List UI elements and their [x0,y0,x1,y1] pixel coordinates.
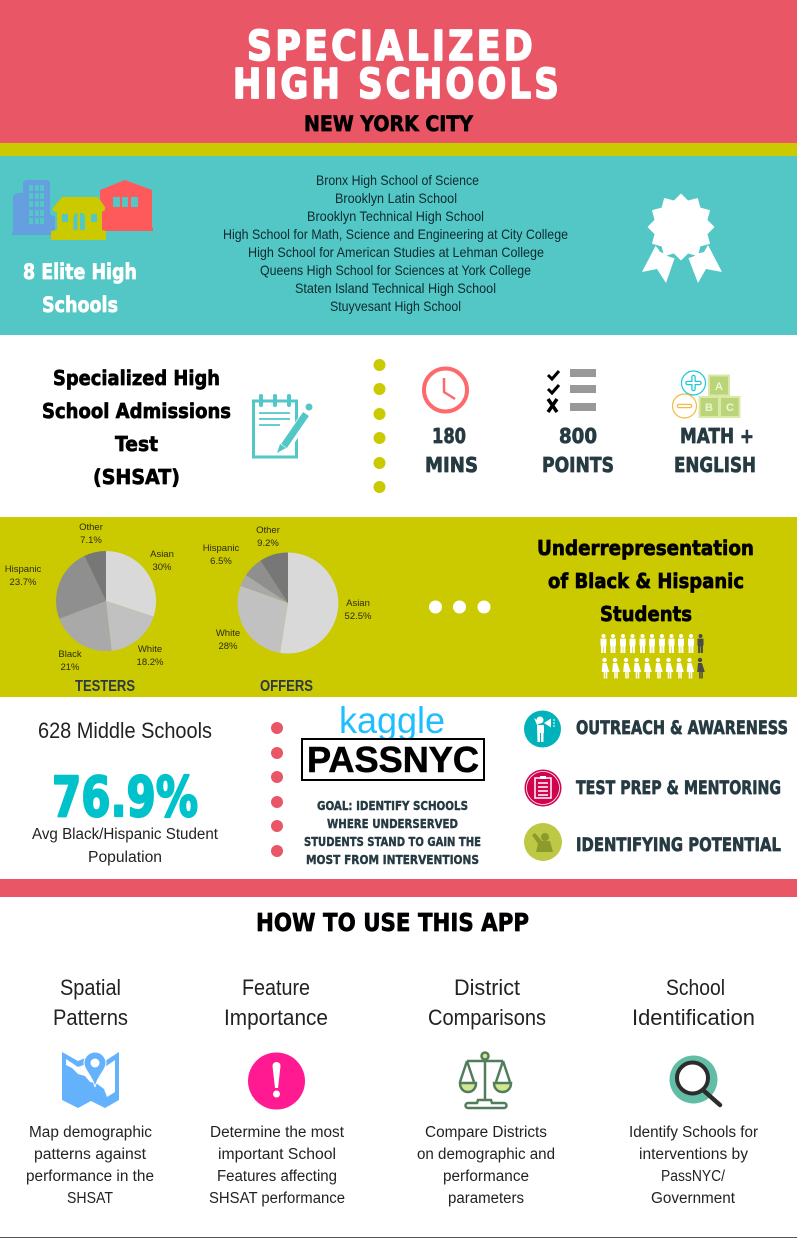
icon: clock [424,368,467,412]
pie chart: offers [203,525,372,653]
heading: district comparisons: District [454,975,520,1000]
text: district description: Compare Districts [425,1124,547,1141]
stat: 800 points: POINTS [542,453,614,477]
text: school description: Identify Schools for [629,1124,758,1141]
heading: school identification [632,975,755,1030]
stat: 180 mins: 180 [432,424,466,448]
heading: spatial patterns: Spatial [60,975,121,1000]
title: HIGH SCHOOLS [233,60,562,108]
heading: feature importance: Importance [224,1005,328,1030]
text: feature description: SHSAT performance [209,1190,345,1207]
icon: outreach megaphone [524,710,561,748]
heading: district comparisons: Comparisons [428,1005,546,1030]
pie chart: testers [5,522,174,673]
text: district description [417,1124,555,1207]
heading: underrepresentation: of Black & Hispanic [548,569,744,593]
pie chart: testers: Other [79,522,103,533]
panel: feature importance [209,975,345,1207]
logo: kaggle: kaggle [339,700,445,741]
text: goal: GOAL: IDENTIFY SCHOOLS [317,799,468,813]
heading: 8 elite high schools: 8 Elite High [23,260,137,284]
heading: school identification: School [666,975,725,1000]
icon: balance scale [460,1052,511,1108]
icon: math and letter blocks: C [726,402,734,414]
heading: feature importance [224,975,328,1030]
pie chart: offers: Other [256,525,280,536]
stat: 76.9 percent: 76.9% [52,765,198,829]
heading: 8 elite high schools: Schools [42,293,118,317]
heading: SHSAT [42,366,231,489]
text: school description: interventions by [639,1146,748,1163]
text: spatial description: patterns against [34,1146,147,1163]
text: district description: parameters [448,1190,524,1207]
stat: math and english: MATH + [680,424,754,448]
heading: spatial patterns: Patterns [53,1005,128,1030]
icon: exclamation [248,1052,305,1110]
ellipsis dots [429,600,490,614]
pie chart: testers: 7.1% [80,535,102,546]
text: spatial description: Map demographic [29,1124,152,1141]
text: feature description: Determine the most [210,1124,345,1141]
panel: PassNYC goal [302,700,484,867]
icon: male people row [600,634,704,653]
pie chart: testers: 30% [152,562,172,573]
pie chart: testers: Asian [150,549,174,560]
school list: Brooklyn Latin School [335,190,457,206]
logo: PASSNYC: PASSNYC [307,739,479,780]
timeline dots [374,359,386,493]
school list: Staten Island Technical High School [295,280,496,296]
pie chart: testers: 21% [60,662,80,673]
panel: middle schools stat [32,718,219,866]
text: goal: MOST FROM INTERVENTIONS [306,853,479,867]
panel: interventions [524,710,788,861]
school list [223,172,568,314]
text: goal: STUDENTS STAND TO GAIN THE [304,835,481,849]
stat: math and english: ENGLISH [674,453,756,477]
icon: map with pin [62,1052,119,1108]
text: 628 middle schools: 628 Middle Schools [38,718,212,743]
icon: math and letter blocks: A [715,381,723,393]
pie chart: offers: 28% [218,641,238,652]
icon: female people row [602,658,705,678]
stat: 800 points [542,424,614,477]
text: spatial description: performance in the [26,1168,154,1185]
heading: underrepresentation: Students [600,602,692,626]
heading: 8 elite high schools [23,260,137,317]
heading: underrepresentation: Underrepresentation [537,536,754,560]
heading: spatial patterns [53,975,128,1030]
pie chart: offers: Asian [346,598,370,609]
text: goal: WHERE UNDERSERVED [327,817,458,831]
text: feature description: important School [218,1146,336,1163]
heading: how to use this app: HOW TO USE THIS APP [256,908,529,937]
panel: SHSAT [0,335,797,517]
icon: award ribbon [642,194,722,283]
pie chart: testers: 18.2% [137,657,164,668]
school list: High School for American Studies at Lehman College [248,244,544,260]
panel: spatial patterns [26,975,154,1207]
heading: school identification: Identification [632,1005,755,1030]
stat: 180 mins [425,424,478,477]
icon: notepad [254,396,312,457]
icon: math and letter blocks [672,371,740,418]
school list: Brooklyn Technical High School [307,208,484,224]
pie chart: testers: 23.7% [10,577,37,588]
title [233,22,562,108]
icon: school buildings [12,180,153,240]
text: goal [304,799,481,867]
subtitle: NEW YORK CITY [304,112,474,136]
icon: raised hand [524,823,562,861]
panel: school identification [629,975,758,1207]
stat: 800 points: 800 [559,424,597,448]
icon: checklist [548,369,596,412]
text: school description: Government [651,1190,736,1207]
text: population caption [32,826,219,866]
text: feature description: Features affecting [217,1168,337,1185]
stat: 180 mins: MINS [425,453,478,477]
heading: SHSAT: Specialized High [53,366,220,390]
text: feature description [209,1124,345,1207]
heading: SHSAT: (SHSAT) [93,465,180,489]
icon: clipboard [524,770,562,806]
text: school description: PassNYC/ [661,1168,726,1185]
pie chart: offers: 52.5% [345,611,372,622]
header band [0,0,797,143]
title: SPECIALIZED [247,22,536,70]
text: school description [629,1124,758,1207]
panel: demographics [0,517,797,697]
text: population caption: Avg Black/Hispanic Student [32,826,219,843]
heading: district comparisons [428,975,546,1030]
red timeline dots [271,722,283,857]
school list: Stuyvesant High School [330,298,461,314]
heading: SHSAT: Test [115,432,158,456]
text: population caption: Population [88,849,162,866]
heading: SHSAT: School Admissions [42,399,231,423]
heading: underrepresentation [537,536,754,626]
pie chart: testers: Black [58,649,82,660]
stat: math and english [674,424,756,477]
pie chart: testers: Hispanic [5,564,41,575]
pie chart: offers: Hispanic [203,543,239,554]
heading: feature importance: Feature [242,975,310,1000]
text: spatial description: SHSAT [67,1190,113,1207]
panel: elite schools [0,156,797,335]
panel: district comparisons [417,975,555,1207]
label: offers: OFFERS [260,678,313,695]
pie chart: offers: White [216,628,240,639]
pie chart: offers: 9.2% [257,538,279,549]
label: testers: TESTERS [75,678,135,695]
text: spatial description [26,1124,154,1207]
text: district description: on demographic and [417,1146,555,1163]
text: district description: performance [443,1168,529,1185]
icon: math and letter blocks: B [705,402,713,414]
icon: magnifier [670,1056,720,1105]
school list: Bronx High School of Science [316,172,479,188]
pie chart: testers: White [138,644,162,655]
school list: Queens High School for Sciences at York College [260,262,531,278]
pie chart: offers: 6.5% [210,556,232,567]
school list: High School for Math, Science and Engineering at City College [223,226,568,242]
